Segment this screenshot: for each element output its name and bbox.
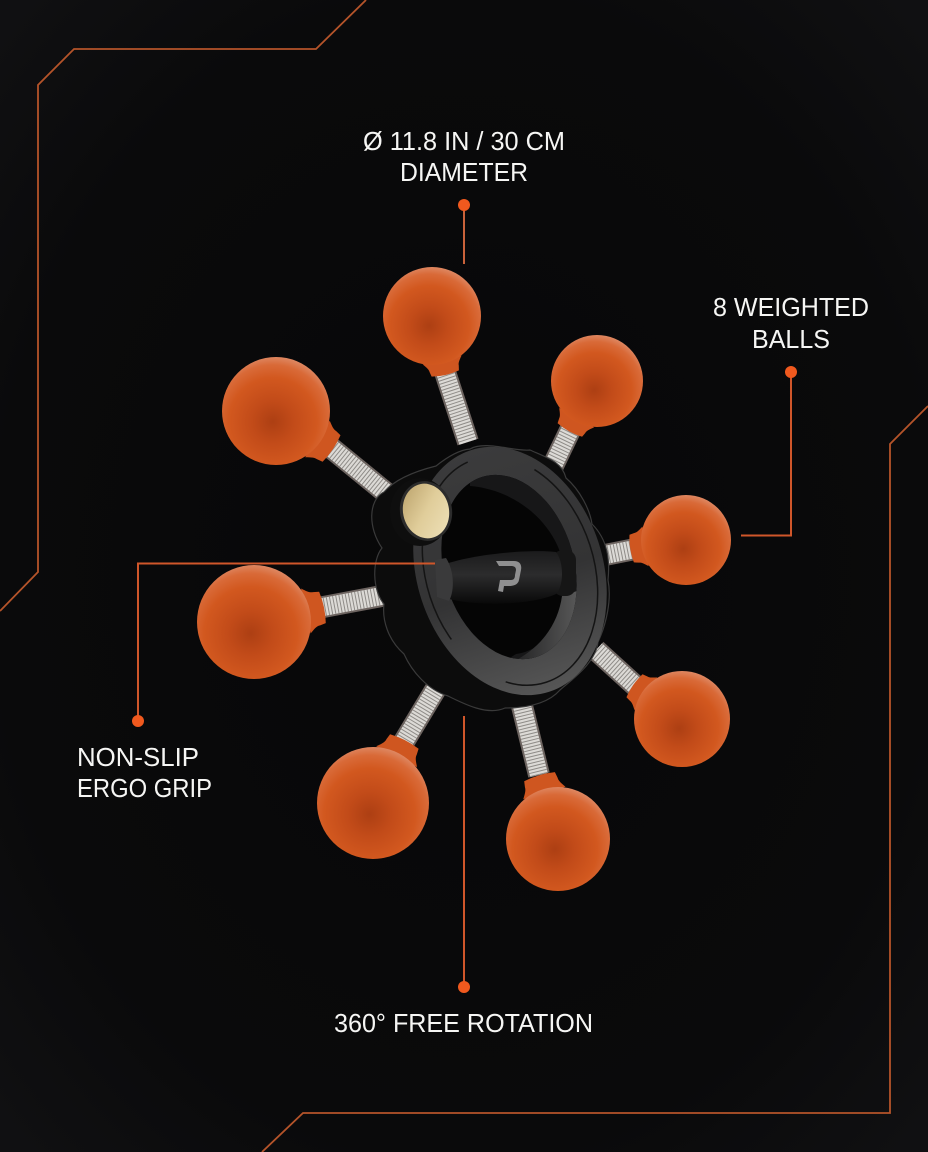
frame line: top left xyxy=(0,0,366,611)
grip near collar xyxy=(435,558,453,601)
ring front xyxy=(413,446,607,696)
label: rotation: 360° FREE ROTATION xyxy=(334,1008,593,1038)
callout: ergo grip xyxy=(77,564,435,803)
leader: weighted balls xyxy=(741,366,797,536)
label: ergo grip: ERGO GRIP xyxy=(77,773,212,803)
callout: weighted balls xyxy=(713,292,869,536)
threaded stems xyxy=(318,372,650,775)
ball: top xyxy=(383,267,481,379)
ball: upper left xyxy=(222,357,345,468)
balls xyxy=(197,267,731,891)
leader: rotation xyxy=(458,716,470,993)
frame line: bottom right xyxy=(262,406,928,1152)
label: diameter: Ø 11.8 IN / 30 CM xyxy=(363,126,565,156)
ball: upper right xyxy=(551,335,643,441)
label: ergo grip xyxy=(77,742,212,803)
grip body xyxy=(438,551,562,604)
ball: lower right xyxy=(622,668,730,767)
leader: diameter xyxy=(458,199,470,264)
label: weighted balls xyxy=(713,292,869,354)
label: weighted balls: 8 WEIGHTED xyxy=(713,292,869,322)
ball: right xyxy=(627,495,731,585)
grip far collar xyxy=(553,550,576,596)
spinner product xyxy=(197,267,731,891)
label: diameter xyxy=(363,126,565,187)
inner bore wall xyxy=(470,475,576,660)
label: weighted balls: BALLS xyxy=(752,324,830,354)
ball: bottom xyxy=(506,769,610,891)
leader: ergo grip xyxy=(132,564,435,727)
ball: left xyxy=(197,565,329,679)
ball: lower left xyxy=(317,730,429,859)
logo P xyxy=(496,561,521,592)
callout: diameter xyxy=(363,126,565,264)
grip handle xyxy=(435,550,576,604)
ring back body with lobes xyxy=(372,446,609,711)
label: diameter: DIAMETER xyxy=(400,157,528,187)
label: ergo grip: NON-SLIP xyxy=(77,742,199,772)
gold button xyxy=(390,476,458,546)
callout: rotation xyxy=(334,716,593,1038)
